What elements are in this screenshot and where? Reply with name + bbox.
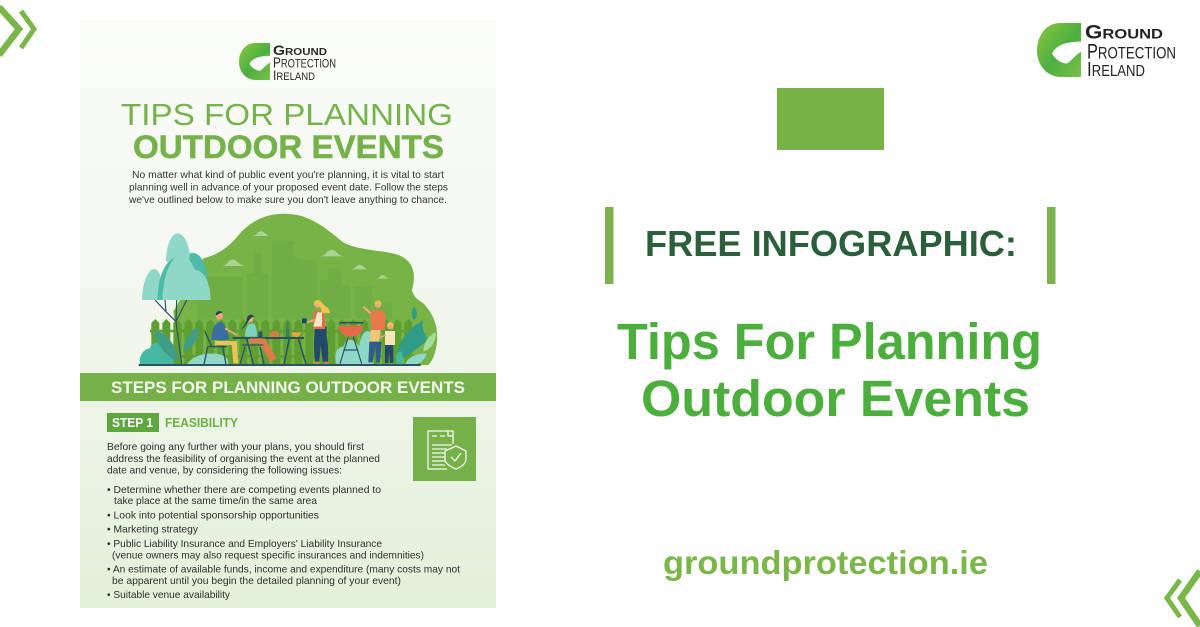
logo wordmark [1085,22,1176,81]
child [380,322,395,363]
main title: Outdoor Events [641,370,1030,427]
logo wordmark: GROUND [1085,22,1163,44]
picket fence [150,319,415,365]
seated man [204,311,238,364]
food on table [258,322,301,337]
steps band [80,373,496,401]
logo icon [1037,23,1081,77]
clouds [222,231,388,279]
chevron arrows: bottom right [1167,571,1200,626]
step 1 text: be apparent until you begin the detailed planning of your event) [112,575,401,587]
chevron arrows: top left [0,7,34,55]
icon: document with shield [413,417,476,481]
step 1 text: • Suitable venue availability [107,589,231,601]
logo icon [239,43,270,80]
step 1 text: • An estimate of available funds, income and expenditure (many costs may not [107,564,460,576]
logo wordmark: IRELAND [1087,59,1145,81]
heading: free infographic with side bars: FREE INFOGRAPHIC: [645,223,1017,264]
decorative green rectangle [777,88,884,150]
infographic preview panel [80,20,496,608]
ground line [139,362,421,368]
step 1 heading: STEP 1 [112,415,153,430]
city skyline [197,242,392,318]
company logo: top right [1037,22,1176,81]
website address: groundprotection.ie [663,544,988,581]
tree [142,233,211,364]
logo wordmark [273,43,336,83]
step 1 text: (venue owners may also request specific insurances and indemnities) [112,550,424,562]
step 1 text: Before going any further with your plans, you should first [107,441,364,453]
logo wordmark: PROTECTION [1087,40,1176,64]
step 1 text: date and venue, by considering the following issues: [107,464,342,476]
heading: free infographic with side bars [605,207,1056,284]
main title [617,313,1042,427]
panel title [121,97,453,165]
logo wordmark: IRELAND [273,67,315,83]
panel title: TIPS FOR PLANNING [121,97,453,132]
green blob background [173,214,437,365]
step 1 text: • Determine whether there are competing events planned to [107,484,381,496]
step 1 heading: FEASIBILITY [165,416,239,430]
logo wordmark: PROTECTION [273,54,336,72]
panel intro text: planning well in advance of your proposed event date. Follow the steps [129,182,448,194]
step 1 text: address the feasibility of organising the event at the planned [107,453,380,465]
step 1 text: take place at the same time/in the same area [114,495,317,507]
man at grill [363,301,386,362]
step 1 text: • Public Liability Insurance and Employers' Liability Insurance [107,538,382,550]
panel logo [239,43,336,83]
barbecue grill [338,323,363,364]
step 1 text: • Marketing strategy [107,524,199,536]
steps band: STEPS FOR PLANNING OUTDOOR EVENTS [111,379,465,397]
standing woman [302,300,330,364]
illustration: outdoor barbecue [139,214,437,365]
panel intro text [128,169,448,206]
step 1 heading [107,413,239,432]
panel title: OUTDOOR EVENTS [133,129,444,165]
logo wordmark: GROUND [273,43,327,58]
table [233,338,306,364]
step 1 text: • Look into potential sponsorship opportunities [107,510,319,522]
seated woman [240,315,277,364]
plants [140,307,436,364]
panel intro text: No matter what kind of public event you're planning, it is vital to start [132,169,444,181]
main title: Tips For Planning [617,313,1042,370]
panel intro text: we've outlined below to make sure you don't leave anything to chance. [128,194,447,206]
step 1 text [107,441,460,601]
